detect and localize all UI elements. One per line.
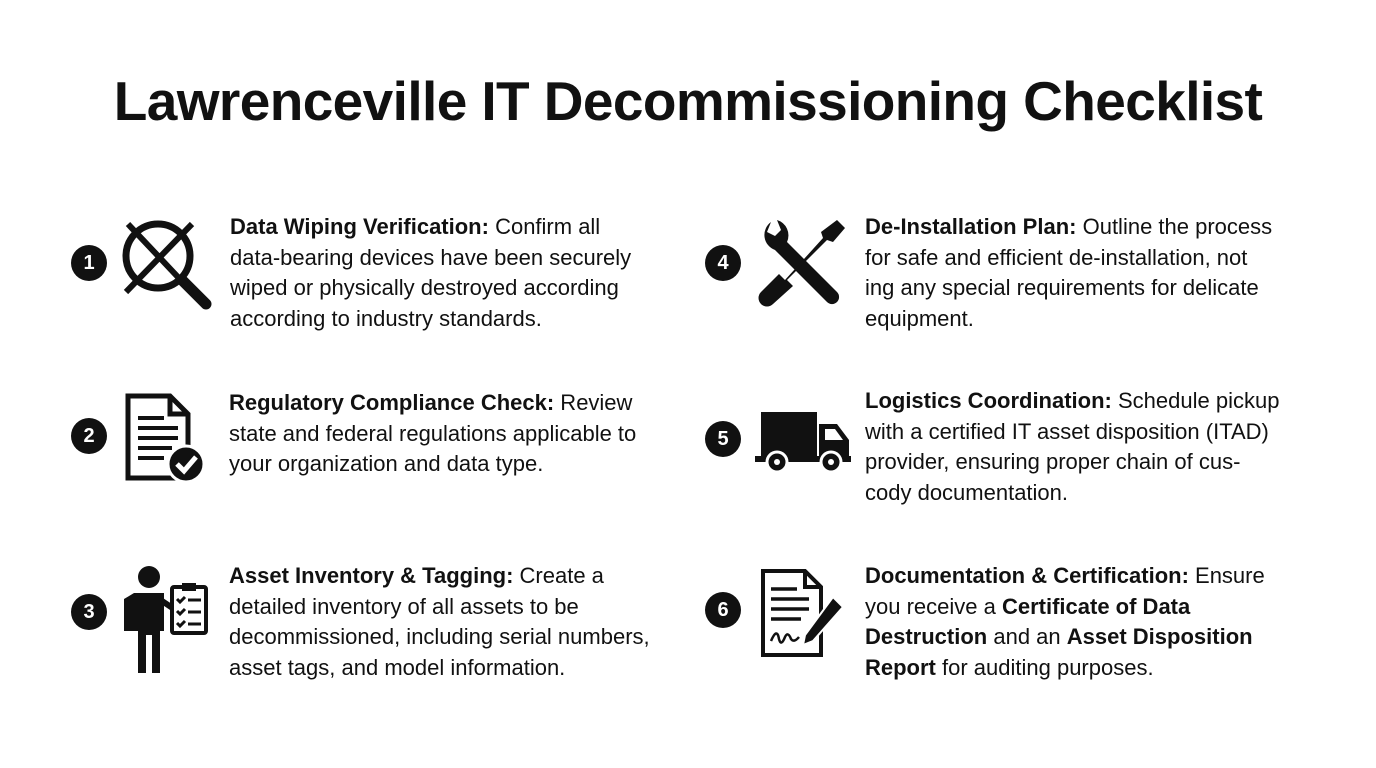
text: De-Installation Plan: Outline the process — [865, 214, 1272, 239]
number 2 — [71, 418, 107, 454]
text: equipment. — [865, 306, 974, 330]
number 2: 2 — [83, 425, 95, 447]
number 5: 5 — [717, 428, 729, 450]
text: Data Wiping Verification: Confirm all — [230, 214, 600, 239]
text: data-bearing devices have been securely — [230, 244, 631, 270]
text — [865, 388, 1279, 504]
icon: person with clipboard — [124, 566, 208, 673]
text: decommissioned, including serial numbers, — [229, 624, 650, 649]
text: ing any special requirements for delicate — [865, 275, 1259, 300]
text — [230, 214, 631, 330]
text: you receive a Certificate of Data — [865, 594, 1190, 618]
item 5: logistics — [705, 388, 1279, 504]
item 2: regulatory — [71, 390, 636, 480]
icon: signed document — [761, 569, 842, 657]
item 6: documentation — [705, 563, 1265, 680]
text: asset tags, and model information. — [229, 654, 565, 680]
text — [865, 563, 1265, 680]
number 1 — [71, 245, 107, 281]
text: Asset Inventory & Tagging: Create a — [229, 563, 604, 588]
text — [229, 390, 636, 476]
text: detailed inventory of all assets to be — [229, 594, 579, 618]
item 4: de-installation — [705, 214, 1272, 330]
number 1: 1 — [83, 252, 95, 274]
item 1: data wiping — [71, 214, 631, 330]
text: Destruction and an Asset Disposition — [865, 624, 1253, 649]
number 4: 4 — [717, 252, 729, 274]
number 3 — [71, 594, 107, 630]
number 4 — [705, 245, 741, 281]
icon: magnifier crossed — [122, 220, 212, 310]
icon: document check — [126, 394, 202, 480]
item 3: asset inventory — [71, 563, 650, 680]
number 5 — [705, 421, 741, 457]
text: Logistics Coordination: Schedule pickup — [865, 388, 1279, 413]
text — [229, 563, 650, 680]
text: Regulatory Compliance Check: Review — [229, 390, 632, 415]
text: Documentation & Certification: Ensure — [865, 563, 1265, 588]
title: Lawrenceville IT Decommissioning Checklist — [114, 70, 1262, 132]
icon: truck — [755, 412, 851, 470]
text: Report for auditing purposes. — [865, 654, 1154, 680]
text: with a certified IT asset disposition (ITAD) — [865, 418, 1269, 444]
number 3: 3 — [83, 601, 95, 623]
text — [865, 214, 1272, 330]
text: for safe and efficient de-installation, not — [865, 244, 1247, 270]
icon: wrench and screwdriver — [758, 220, 845, 306]
text: wiped or physically destroyed according — [230, 275, 619, 300]
text: according to industry standards. — [230, 306, 542, 330]
text: your organization and data type. — [229, 451, 543, 476]
text: state and federal regulations applicable to — [229, 420, 636, 446]
text: cody documentation. — [865, 480, 1068, 504]
text: provider, ensuring proper chain of cus- — [865, 449, 1240, 474]
number 6: 6 — [717, 599, 729, 621]
number 6 — [705, 592, 741, 628]
